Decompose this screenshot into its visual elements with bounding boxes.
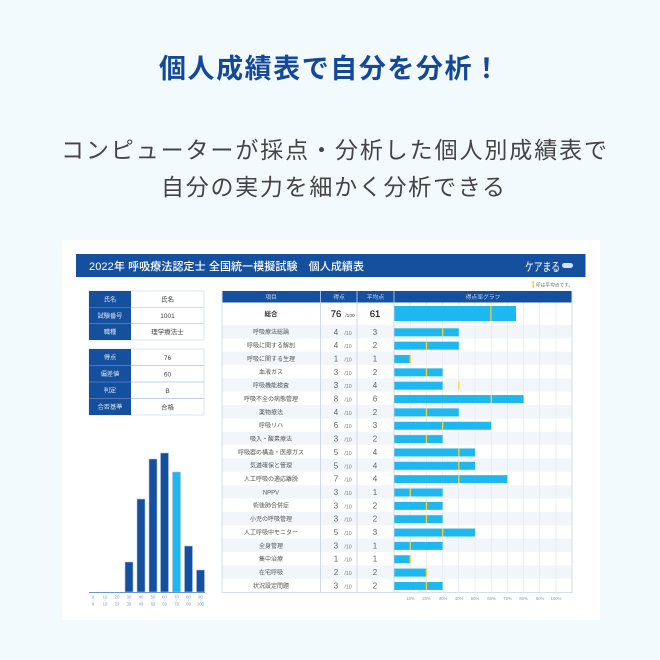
row: 術後肺合併症: [253, 501, 443, 510]
row: 呼吸療法総論: [253, 328, 459, 337]
row: 集中治療: 集中治療: [259, 555, 283, 563]
row: 在宅呼吸: 在宅呼吸: [259, 568, 283, 576]
row: 集中治療: 1: [373, 555, 378, 564]
histogram axis labels: 70: [174, 594, 179, 600]
row: 呼吸器の構造・医療ガス: 5: [334, 448, 339, 457]
row: 全身管理: 3: [334, 541, 339, 550]
histogram axis labels: 40: [139, 594, 144, 600]
row: 呼吸リハ: 6: [334, 421, 339, 430]
row: 総合: /100: [345, 313, 355, 319]
table: examinee info: 理学療法士: [151, 327, 184, 336]
row: 薬物療法: 薬物療法: [259, 408, 283, 416]
legend note: average marker: 印は平均点です。: [536, 282, 573, 288]
row: 全身管理: 全身管理: [259, 542, 283, 550]
row: 状況設定問題: 3: [334, 581, 339, 590]
title: 個人成績表で自分を分析！: [159, 54, 500, 84]
histogram axis labels: 30: [127, 594, 132, 600]
intro text: 自分の実力を細かく分析できる: [161, 174, 505, 200]
graph axis labels: 50%: [471, 596, 479, 601]
table: result summary: [89, 349, 204, 415]
row: 集中治療: 1: [334, 555, 339, 564]
histogram axis labels: 20: [115, 594, 120, 600]
row: 総合: 76: [331, 309, 341, 320]
row: 集中治療: [259, 555, 411, 564]
table column headers: [222, 291, 572, 302]
histogram axis labels: 29: [115, 602, 120, 606]
row: 呼吸に関する生理: [247, 354, 411, 364]
row: 薬物療法: 2: [373, 408, 378, 417]
graph axis labels: 20%: [422, 596, 431, 601]
row: 呼吸機能検査: 呼吸機能検査: [253, 382, 289, 390]
row: 呼吸に関する解剖: [247, 341, 459, 350]
row: 在宅呼吸: /10: [344, 571, 352, 577]
report header bar: 2022年 呼吸療法認定士 全国統一模擬試験 個人成績表: [89, 259, 364, 273]
histogram axis labels: 10: [103, 594, 108, 600]
table: examinee info: 試験番号: [98, 312, 122, 320]
histogram axis labels: 0: [92, 594, 95, 600]
histogram axis labels: 89: [186, 602, 191, 606]
graph axis labels: 70%: [503, 596, 512, 601]
row: 全身管理: 1: [373, 541, 378, 550]
row: 吸入・酸素療法: /10: [344, 438, 352, 444]
histogram axis labels: 90: [198, 594, 203, 600]
row: 吸入・酸素療法: 吸入・酸素療法: [250, 435, 292, 443]
table: result summary: 判定: [104, 386, 116, 394]
histogram axis labels: 19: [103, 602, 108, 606]
row: 呼吸機能検査: /10: [344, 384, 352, 390]
row: 呼吸不全の病態管理: 6: [373, 395, 378, 404]
row: 在宅呼吸: 2: [334, 568, 339, 577]
row: 呼吸療法総論: /10: [344, 331, 352, 337]
table: examinee info: 氏名: [104, 296, 116, 304]
graph axis labels: [406, 596, 562, 601]
table: result summary: 合格: [161, 402, 174, 412]
histogram axis labels: 50: [151, 594, 156, 600]
row: 状況設定問題: 2: [373, 581, 378, 590]
table: result summary: 合否基準: [98, 403, 122, 411]
row: 呼吸不全の病態管理: 8: [334, 395, 339, 404]
histogram axis labels: 69: [162, 602, 167, 606]
row: NPPV: /10: [344, 491, 352, 497]
row: 呼吸療法総論: 呼吸療法総論: [253, 328, 289, 336]
row: 呼吸機能検査: 3: [334, 381, 339, 390]
row: 吸入・酸素療法: [250, 435, 443, 444]
table column headers: 得点: [333, 293, 345, 301]
intro text: [61, 137, 607, 200]
row: NPPV: 3: [334, 488, 339, 497]
row: 呼吸機能検査: 4: [373, 381, 378, 390]
row: 呼吸に関する生理: /10: [344, 358, 352, 364]
row: 人工呼吸中モニター: 人工呼吸中モニター: [244, 528, 298, 536]
row: 術後肺合併症: /10: [344, 504, 352, 510]
table: result summary: B: [165, 388, 170, 395]
table: examinee info: 氏名: [161, 294, 174, 304]
row: 集中治療: /10: [344, 558, 352, 564]
row: 状況設定問題: 状況設定問題: [253, 582, 289, 590]
graph axis labels: 80%: [519, 596, 528, 601]
table column headers: 項目: [265, 294, 277, 301]
row: 小児の呼吸管理: 2: [373, 515, 378, 524]
row: NPPV: 1: [373, 488, 378, 497]
row: 気道確保と管理: 5: [334, 461, 339, 470]
row: 人工呼吸の適応離脱: 4: [373, 475, 378, 484]
row: 呼吸に関する解剖: 2: [373, 341, 378, 350]
graph axis labels: 30%: [439, 596, 447, 601]
table: subject scores and bar graph: [222, 291, 572, 601]
row: 人工呼吸の適応離脱: /10: [344, 478, 352, 484]
row: 呼吸不全の病態管理: 呼吸不全の病態管理: [244, 395, 298, 403]
row: 呼吸器の構造・医療ガス: /10: [344, 451, 352, 457]
row: 血液ガス: 3: [334, 368, 339, 377]
row: 人工呼吸中モニター: 3: [373, 528, 378, 537]
row: 呼吸療法総論: 4: [334, 328, 339, 337]
row: 血液ガス: 2: [373, 368, 378, 377]
row: 在宅呼吸: [259, 568, 427, 577]
row: 小児の呼吸管理: 小児の呼吸管理: [250, 515, 292, 523]
row: 総合: 61: [370, 309, 380, 320]
chart: score distribution histogram: [89, 453, 205, 606]
row: 呼吸器の構造・医療ガス: 4: [373, 448, 378, 457]
histogram axis labels: [92, 594, 205, 606]
row: 吸入・酸素療法: 2: [373, 435, 378, 444]
graph axis labels: 10%: [406, 596, 415, 601]
row: 人工呼吸中モニター: [244, 528, 475, 537]
row: 術後肺合併症: 3: [334, 501, 339, 510]
histogram axis labels: 100: [197, 602, 205, 606]
histogram axis labels: 49: [139, 602, 144, 606]
logo: ケアまる: ケアまる: [525, 261, 560, 274]
row: 人工呼吸の適応離脱: 7: [334, 475, 339, 484]
row: 在宅呼吸: 2: [373, 568, 378, 577]
row: 呼吸に関する解剖: 4: [334, 341, 339, 350]
row: 血液ガス: 血液ガス: [259, 368, 283, 376]
row: 呼吸療法総論: 3: [373, 328, 378, 337]
row: 呼吸リハ: 3: [373, 421, 378, 430]
table: examinee info: 職種: [104, 328, 116, 336]
histogram axis labels: 80: [186, 594, 191, 600]
row: 呼吸機能検査: [253, 381, 460, 390]
row: 呼吸不全の病態管理: /10: [344, 398, 352, 404]
row: 血液ガス: [259, 368, 443, 377]
row: NPPV: NPPV: [263, 490, 279, 496]
panel: score report card: [62, 240, 600, 620]
row: 呼吸器の構造・医療ガス: [238, 448, 475, 457]
row: 呼吸に関する生理: 1: [334, 355, 339, 364]
row: 人工呼吸中モニター: 5: [334, 528, 339, 537]
table: result summary: 偏差値: [101, 370, 119, 378]
row: 人工呼吸の適応離脱: [244, 475, 507, 484]
graph axis labels: 40%: [455, 596, 463, 601]
row: 呼吸に関する解剖: /10: [344, 344, 352, 350]
row: 呼吸に関する解剖: 呼吸に関する解剖: [247, 342, 295, 350]
intro text: コンピューターが採点・分析した個人別成績表で: [61, 137, 607, 163]
row: 術後肺合併症: 術後肺合併症: [253, 502, 289, 510]
row: 気道確保と管理: /10: [344, 464, 352, 470]
row: 血液ガス: /10: [344, 371, 352, 377]
table: result summary: 76: [164, 355, 171, 362]
row: 総合: 総合: [264, 309, 278, 318]
row: 小児の呼吸管理: 3: [334, 515, 339, 524]
histogram axis labels: 60: [162, 594, 167, 600]
row: 薬物療法: 4: [334, 408, 339, 417]
row: NPPV: [263, 488, 443, 497]
row: 全身管理: /10: [344, 544, 352, 550]
row: 人工呼吸中モニター: /10: [344, 531, 352, 537]
row: 気道確保と管理: 4: [373, 461, 378, 470]
table column headers: 得点率グラフ: [466, 293, 500, 301]
histogram axis labels: 59: [151, 602, 156, 606]
row: 呼吸リハ: /10: [344, 424, 352, 430]
row: 気道確保と管理: 気道確保と管理: [250, 462, 292, 470]
row: 状況設定問題: /10: [344, 584, 352, 590]
legend note: average marker: [532, 281, 573, 288]
row: 人工呼吸の適応離脱: 人工呼吸の適応離脱: [244, 475, 298, 483]
graph axis labels: 100%: [550, 596, 562, 601]
report header bar: [76, 254, 586, 277]
graph axis labels: 90%: [536, 596, 544, 601]
row: 吸入・酸素療法: 3: [334, 435, 339, 444]
row: 術後肺合併症: 2: [373, 501, 378, 510]
row: 呼吸に関する生理: 1: [373, 355, 378, 364]
row: 呼吸リハ: [259, 421, 491, 430]
row: 総合: [264, 306, 516, 321]
row: 全身管理: [259, 541, 443, 550]
row: 小児の呼吸管理: /10: [344, 518, 352, 524]
table: examinee info: 1001: [160, 313, 175, 320]
row: 気道確保と管理: [250, 461, 475, 470]
row: 呼吸不全の病態管理: [244, 395, 524, 404]
histogram axis labels: 79: [174, 602, 179, 606]
row: 状況設定問題: [253, 581, 443, 590]
row: 呼吸に関する生理: 呼吸に関する生理: [247, 355, 295, 363]
table column headers: 平均点: [367, 293, 384, 301]
row: 薬物療法: [259, 408, 459, 417]
table: examinee info: [89, 291, 204, 340]
row: 呼吸器の構造・医療ガス: 呼吸器の構造・医療ガス: [238, 448, 304, 456]
table: result summary: 60: [164, 372, 171, 378]
row: 小児の呼吸管理: [250, 515, 443, 524]
graph axis labels: 60%: [487, 596, 496, 601]
histogram axis labels: 39: [127, 602, 132, 606]
histogram axis labels: 9: [92, 602, 95, 606]
row: 呼吸リハ: 呼吸リハ: [259, 423, 283, 430]
table: result summary: 得点: [104, 354, 116, 362]
row: 薬物療法: /10: [344, 411, 352, 417]
